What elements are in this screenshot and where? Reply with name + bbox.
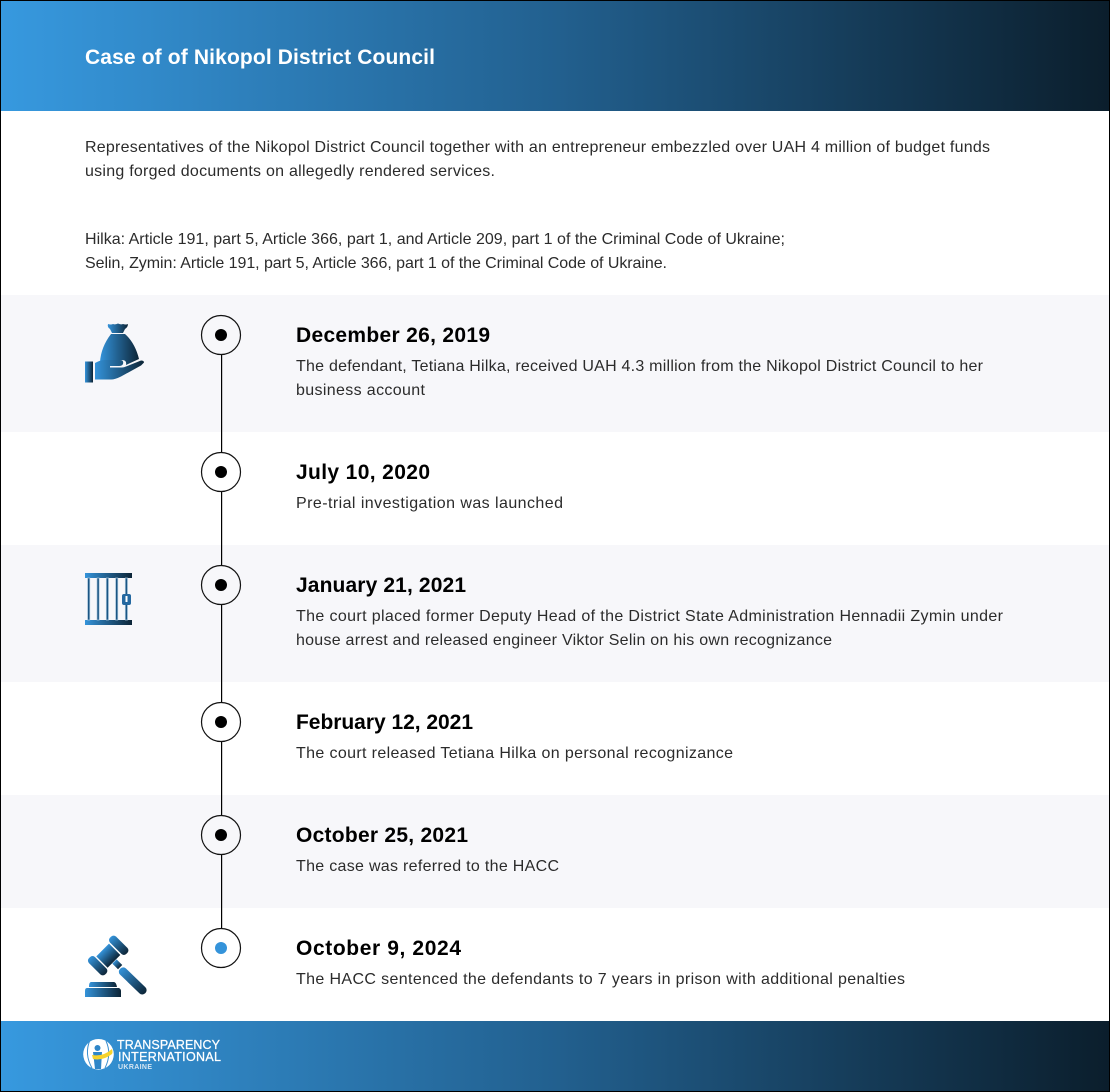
event: July 10, 2020 xyxy=(202,452,563,512)
intro text xyxy=(85,139,990,180)
event: January 21, 2021: January 21, 2021 xyxy=(296,574,466,597)
header banner xyxy=(1,1,1109,111)
icon: money bag in hand xyxy=(85,324,144,382)
logo: Transparency International Ukraine: UKRAINE xyxy=(118,1064,152,1071)
legal articles text xyxy=(85,231,785,272)
footer banner xyxy=(1,1021,1109,1091)
event: February 12, 2021: February 12, 2021 xyxy=(296,711,473,734)
legal articles text: Selin, Zymin: Article 191, part 5, Article 366, part 1 of the Criminal Code of Ukraine. xyxy=(85,255,667,272)
event: December 26, 2019: December 26, 2019 xyxy=(296,324,490,347)
event: December 26, 2019: The defendant, Tetiana Hilka, received UAH 4.3 million from the Nikopol District Council to her xyxy=(296,358,984,375)
logo: Transparency International Ukraine: TRANSPARENCY xyxy=(117,1038,221,1052)
event: October 9, 2024: October 9, 2024 xyxy=(296,937,461,960)
event: February 12, 2021 xyxy=(202,702,733,762)
event: October 25, 2021: October 25, 2021 xyxy=(296,824,468,847)
event: October 25, 2021 xyxy=(202,816,559,875)
legal articles text: Hilka: Article 191, part 5, Article 366, part 1, and Article 209, part 1 of the Criminal Code of Ukraine; xyxy=(85,231,785,248)
event: January 21, 2021 xyxy=(202,566,1004,649)
logo: Transparency International Ukraine: INTERNATIONAL xyxy=(118,1050,221,1064)
event: December 26, 2019: business account xyxy=(296,382,426,399)
icon: prison bars xyxy=(85,573,132,625)
logo: Transparency International Ukraine xyxy=(83,1038,221,1071)
timeline line xyxy=(221,335,222,948)
intro text: using forged documents on allegedly rendered services. xyxy=(85,163,495,180)
event: July 10, 2020: Pre-trial investigation was launched xyxy=(296,495,563,512)
event: January 21, 2021: house arrest and released engineer Viktor Selin on his own recognizance xyxy=(296,632,832,649)
event: October 25, 2021: The case was referred to the HACC xyxy=(296,858,559,875)
event: February 12, 2021: The court released Tetiana Hilka on personal recognizance xyxy=(296,745,733,762)
event: December 26, 2019 xyxy=(202,316,984,399)
intro text: Representatives of the Nikopol District Council together with an entrepreneur embezzled over UAH 4 million of budget funds xyxy=(85,139,990,156)
row backgrounds xyxy=(1,295,1109,908)
icon: judge gavel xyxy=(85,934,148,997)
event: October 9, 2024 xyxy=(202,928,905,988)
title: Case of of Nikopol District Council xyxy=(85,46,435,69)
event: October 9, 2024: The HACC sentenced the defendants to 7 years in prison with additional penalties xyxy=(296,971,905,988)
event: January 21, 2021: The court placed former Deputy Head of the District State Administration Hennadii Zymin under xyxy=(296,608,1004,625)
event: July 10, 2020: July 10, 2020 xyxy=(296,461,430,484)
